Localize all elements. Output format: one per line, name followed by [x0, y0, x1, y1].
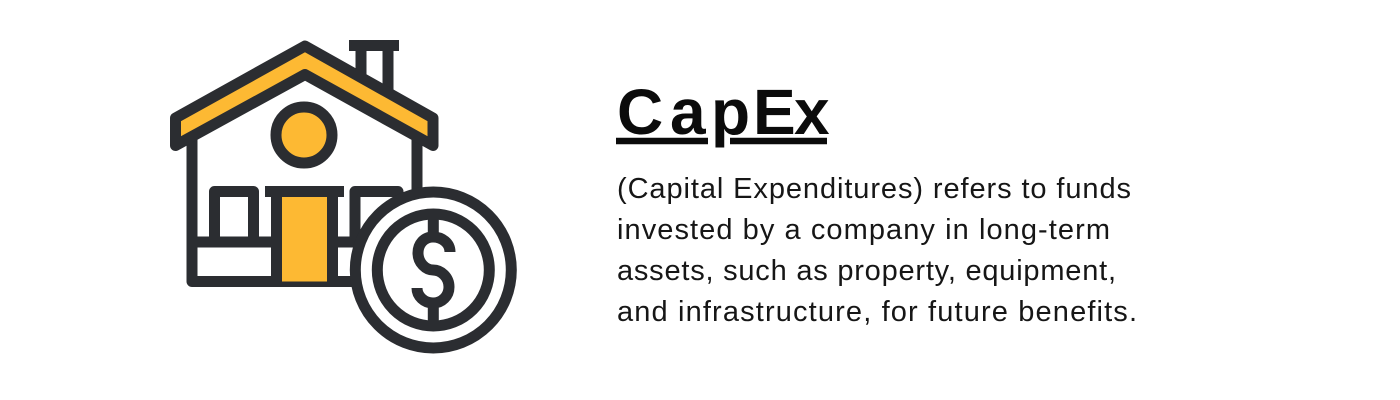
icon: house with dollar coin: [176, 45, 511, 348]
title underline: [616, 138, 827, 144]
title: CapEx: [617, 76, 830, 148]
house walls: [192, 135, 417, 282]
description text: and infrastructure, for future benefits.: [617, 296, 1137, 328]
porch rail: [192, 236, 365, 248]
description text: invested by a company in long-term: [617, 214, 1110, 246]
description text: (Capital Expenditures) refers to funds: [617, 173, 1131, 205]
description text: assets, such as property, equipment,: [617, 255, 1116, 287]
coin: [355, 192, 511, 348]
round attic window: [276, 107, 332, 163]
chimney: [349, 45, 399, 96]
left window: [214, 192, 254, 242]
door: [265, 192, 344, 282]
roof: [176, 46, 433, 146]
dollar sign: [417, 218, 450, 322]
description text: [617, 173, 1137, 328]
right window: [355, 192, 398, 242]
